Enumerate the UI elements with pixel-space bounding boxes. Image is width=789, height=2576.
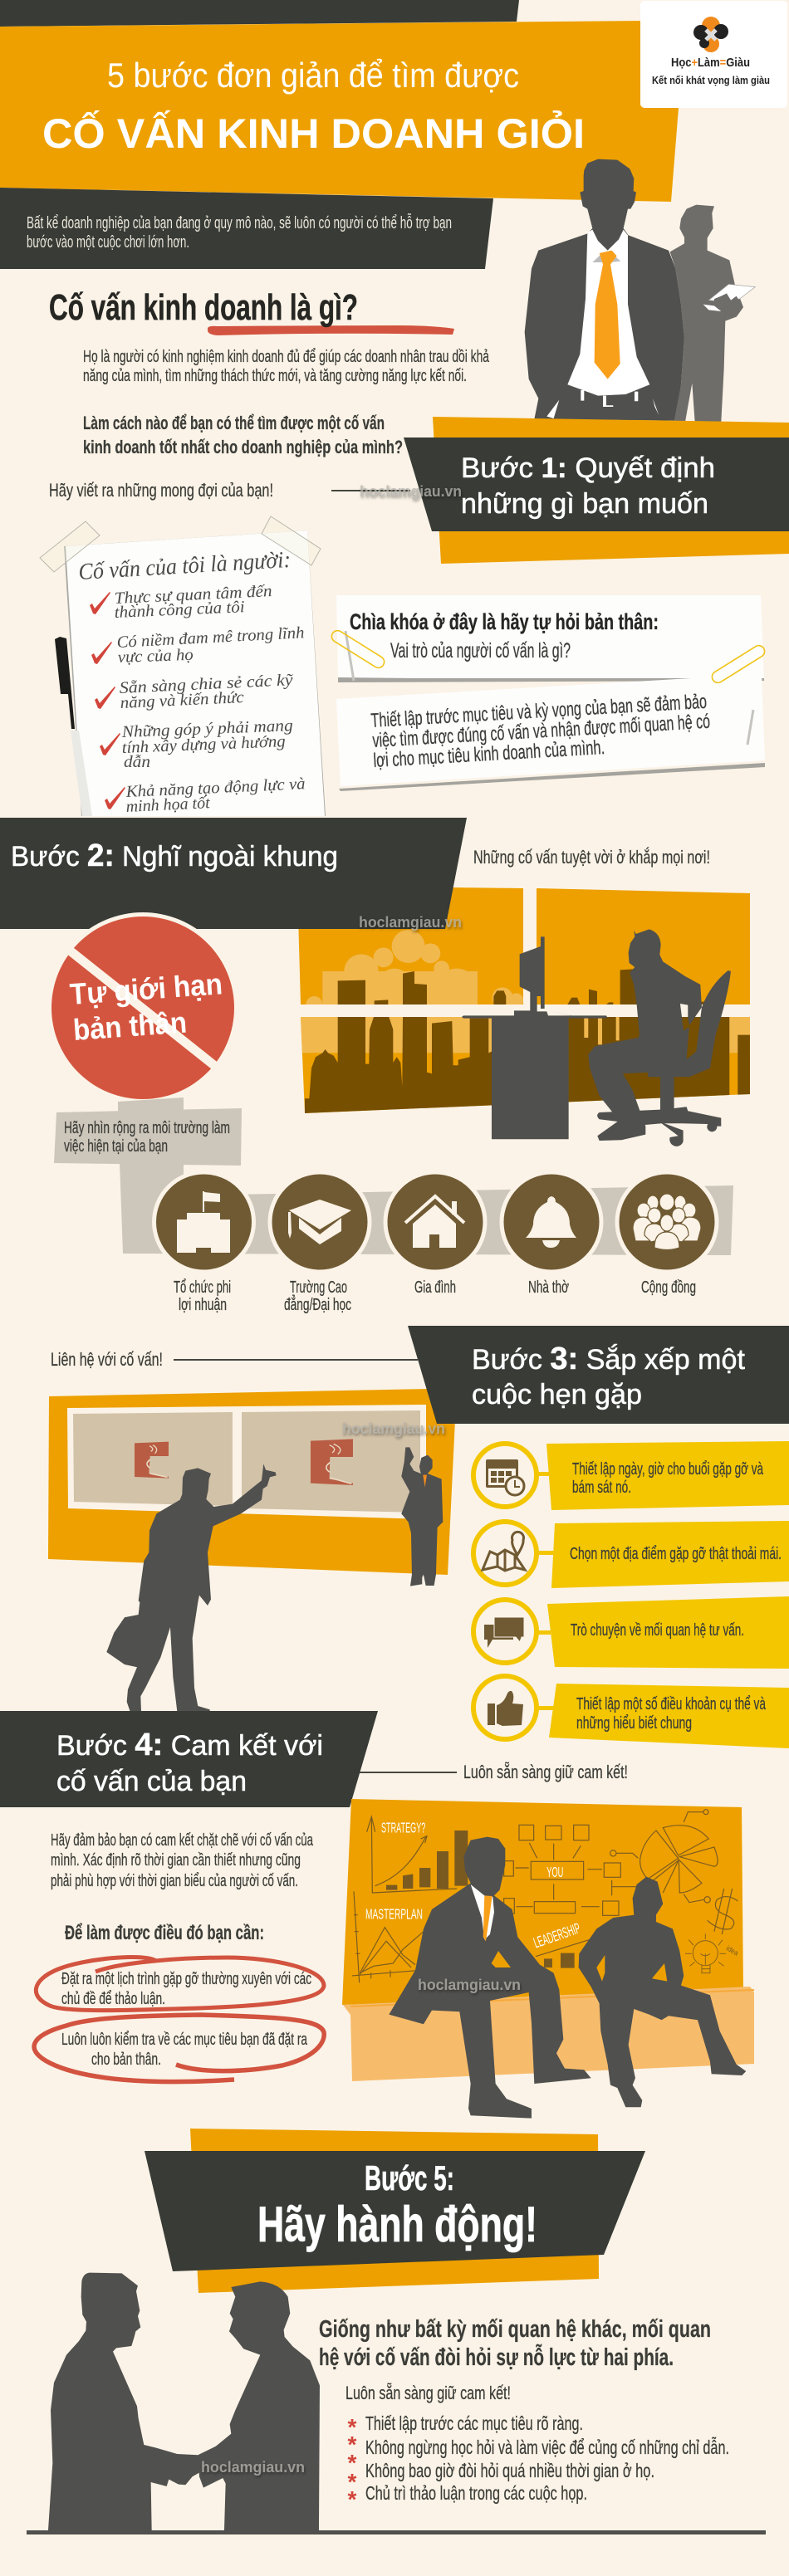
checklist items: minh họa tốt: [125, 794, 211, 816]
step 1 banner: những gì bạn muốn: [461, 488, 708, 520]
watermarks: [201, 483, 521, 2476]
step 1 banner: [404, 417, 789, 564]
step 1 banner: Bước 1: Quyết định: [461, 452, 715, 484]
buildings lower: [305, 1017, 750, 1113]
icon labels: Trường Cao: [290, 1278, 347, 1297]
icon labels: lợi nhuận: [179, 1296, 227, 1314]
heading: what is a business adviser: Cố vấn kinh doanh là gì?: [49, 287, 358, 328]
list: actions: *: [347, 2450, 357, 2476]
watermarks: hoclamgiau.vn: [201, 2459, 305, 2476]
callout: advisers everywhere: Những cố vấn tuyệt vời ở khắp mọi nơi!: [473, 847, 710, 868]
icon: calendar: [486, 1459, 524, 1495]
checklist items: năng và kiến thức: [120, 688, 244, 712]
checklist paper: [40, 516, 326, 816]
icon labels: Tổ chức phi: [174, 1278, 231, 1297]
step 3 banner: Bước 3: Sắp xếp một: [472, 1342, 746, 1376]
list: actions: *: [347, 2432, 357, 2457]
cup icons: [135, 1442, 169, 1479]
step 2 banner: Bước 2: Nghĩ ngoài khung: [11, 838, 338, 873]
text block: definition: Họ là người có kinh nghiệm kinh doanh đủ để giúp các doanh nhân trau dồi khả: [83, 348, 490, 366]
text block: question: Làm cách nào để bạn có thể tìm được một cố vấn: [83, 413, 385, 433]
step 4 banner: [0, 1711, 378, 1807]
callout: write expectations: Hãy viết ra những mong đợi của bạn!: [49, 480, 273, 501]
callout: contact adviser: Liên hệ với cố vấn!: [51, 1349, 163, 1370]
ground line: [27, 2530, 766, 2534]
step 5 banner: Hãy hành động!: [257, 2197, 537, 2252]
illustration: billboard: [48, 1389, 455, 1575]
check marks: [90, 592, 125, 809]
text block: question: [83, 413, 403, 457]
watermarks: hoclamgiau.vn: [418, 1977, 521, 1993]
text block: commitment: Hãy đảm bảo bạn có cam kết chặt chẽ với cố vấn của: [51, 1831, 314, 1850]
illustration: two businessmen: [525, 159, 755, 422]
man: [588, 929, 702, 1141]
illustration: man at desk: [462, 929, 731, 1146]
board sketches: [352, 1810, 738, 1982]
illustration: strategy board with seated men: STRATEGY?: [381, 1819, 425, 1835]
circled note 1: [36, 1957, 324, 2011]
item: terms: [473, 1676, 789, 1748]
checklist items: Có niềm đam mê trong lĩnh: [116, 623, 305, 652]
pen: [55, 637, 92, 816]
step 4 banner: cố vấn của bạn: [56, 1766, 247, 1797]
icon: house: [405, 1196, 464, 1248]
no sign: self limitation: [47, 912, 238, 1103]
text block: commitment: mình. Xác định rõ thời gian cần thiết nhưng cũng: [51, 1851, 301, 1870]
note: set goals: [336, 674, 765, 791]
checklist items: thành công của tôi: [114, 598, 245, 622]
text block: definition: [83, 348, 490, 385]
title line 2: CỐ VẤN KINH DOANH GIỎI: [42, 110, 585, 157]
icon: thumb up: [488, 1691, 523, 1726]
icon labels: Cộng đồng: [641, 1278, 696, 1297]
illustration: strategy board with seated men: MASTERPLAN: [365, 1906, 423, 1923]
illustration: strategy board with seated men: YOU: [546, 1864, 563, 1880]
list: actions: [347, 2412, 729, 2512]
intro band: bước vào một cuộc chơi lớn hơn.: [27, 233, 189, 252]
logo: Học+Làm=Giàu: [671, 56, 750, 70]
list: actions: Chủ trì thảo luận trong các cuộc họp.: [365, 2482, 587, 2504]
note: set goals: lợi cho mục tiêu kinh doanh của mình.: [373, 736, 605, 772]
text block: commitment: [51, 1831, 314, 1890]
text block: definition: năng của mình, tìm những thách thức mới, và tăng cường năng lực kết nối.: [83, 367, 467, 385]
step 5 banner: [145, 2129, 645, 2293]
circled note 2: cho bản thân.: [91, 2051, 161, 2069]
list: actions: *: [347, 2414, 357, 2440]
checklist items: vực của họ: [117, 646, 194, 667]
chair: [597, 970, 731, 1146]
callout: keep commitment: Luôn sẵn sàng giữ cam kết!: [463, 1762, 628, 1782]
icons row: [154, 1172, 717, 1314]
list: actions: *: [347, 2469, 357, 2495]
icon: church bell: [526, 1196, 576, 1248]
icon: nonprofit building: [177, 1191, 230, 1253]
item: terms: những hiểu biết chung: [576, 1714, 692, 1733]
seated man right: [579, 1877, 746, 2107]
illustration: strategy board with seated men: idea: [725, 1943, 740, 1958]
subheading: Để làm được điều đó bạn cần:: [65, 1922, 264, 1944]
tape: [40, 516, 321, 572]
item: talk: [473, 1596, 789, 1669]
no sign: self limitation: Tự giới hạn: [69, 966, 223, 1011]
checklist items: Thực sự quan tâm đến: [114, 582, 272, 608]
icon labels: đẳng/Đại học: [284, 1294, 351, 1314]
seated man left: [389, 1837, 591, 2119]
checklist title: Cố vấn của tôi là người:: [78, 547, 292, 585]
text block: commitment: phải phù hợp với thời gian biểu của người cố vấn.: [51, 1872, 298, 1890]
connector with note: [54, 1097, 733, 1255]
checklist items: [114, 582, 306, 816]
checklist items: Sẵn sàng chia sẻ các kỹ: [119, 671, 294, 697]
icon labels: [174, 1278, 696, 1314]
list: meeting steps: [473, 1441, 789, 1748]
item: choose place: [473, 1521, 789, 1588]
step 3 banner: cuộc hẹn gặp: [472, 1379, 642, 1410]
circled note 2: [34, 2015, 324, 2082]
illustration: men waving: [106, 1447, 443, 1712]
checklist items: tính xây dựng và hướng: [121, 732, 286, 757]
step 5 banner: Bước 5:: [365, 2158, 454, 2197]
illustration: handshake: [48, 2273, 320, 2530]
circled note 2: Luôn luôn kiểm tra về các mục tiêu bạn đã đặt ra: [61, 2031, 308, 2049]
icon labels: Gia đình: [414, 1278, 456, 1297]
circled note 1: Đặt ra một lịch trình gặp gỡ thường xuyên với các: [61, 1970, 311, 1988]
note: key question: Chìa khóa ở đây là hãy tự hỏi bản thân:: [350, 609, 659, 634]
illustration: strategy board with seated men: LEADERSHIP: [532, 1920, 582, 1951]
intro band: Bất kể doanh nghiệp của bạn đang ở quy mô nào, sẽ luôn có người có thể hỗ trợ bạn: [27, 213, 452, 232]
text block: question: kinh doanh tốt nhất cho doanh nghiệp của mình?: [83, 437, 403, 457]
circled note 1: chủ đề để thảo luận.: [61, 1990, 165, 2008]
icon: chat: [484, 1617, 524, 1648]
step 3 banner: [408, 1326, 789, 1424]
window with city skyline: [295, 880, 760, 1121]
panel: header: [0, 0, 679, 202]
intro band: [0, 188, 493, 269]
checklist items: dẫn: [124, 753, 150, 771]
step 4 banner: Bước 4: Cam kết với: [56, 1728, 323, 1762]
title line 1: 5 bước đơn giản để tìm được: [107, 56, 519, 95]
buildings upper: [338, 969, 710, 1004]
logo: [640, 1, 787, 108]
icon: graduation cap: [288, 1200, 351, 1244]
paper clips: [330, 628, 767, 685]
text block: relationship: Luôn sẵn sàng giữ cam kết!: [345, 2383, 511, 2403]
note: key question: [336, 595, 764, 682]
connector with note: việc hiện tại của bạn: [64, 1137, 168, 1156]
icon labels: Nhà thờ: [528, 1278, 569, 1297]
connector with note: Hãy nhìn rộng ra môi trường làm: [64, 1119, 230, 1137]
step 2 banner: [0, 818, 467, 929]
item: set date: [473, 1441, 789, 1510]
no sign: self limitation: bản thân: [72, 1005, 188, 1047]
watermarks: hoclamgiau.vn: [342, 1420, 445, 1437]
icon: map: [483, 1532, 525, 1571]
text block: relationship: [319, 2316, 711, 2403]
list: actions: Thiết lập trước các mục tiêu rõ ràng.: [365, 2412, 583, 2434]
watermarks: hoclamgiau.vn: [360, 483, 462, 500]
clouds: [301, 930, 754, 1053]
watermarks: hoclamgiau.vn: [359, 914, 462, 931]
checklist items: Những góp ý phải mang: [120, 716, 293, 741]
checklist items: Khả năng tạo động lực và: [125, 775, 306, 801]
list: actions: Không bao giờ đòi hỏi quá nhiều thời gian ở họ.: [365, 2460, 654, 2481]
logo: Kết nối khát vọng làm giàu: [652, 74, 770, 86]
icon: community: [633, 1194, 701, 1250]
illustration: strategy board with seated men: [342, 1799, 754, 2119]
item: set date: bám sát nó.: [572, 1479, 631, 1497]
list: actions: *: [347, 2486, 357, 2512]
note: key question: Vai trò của người cố vấn là gì?: [390, 639, 571, 662]
